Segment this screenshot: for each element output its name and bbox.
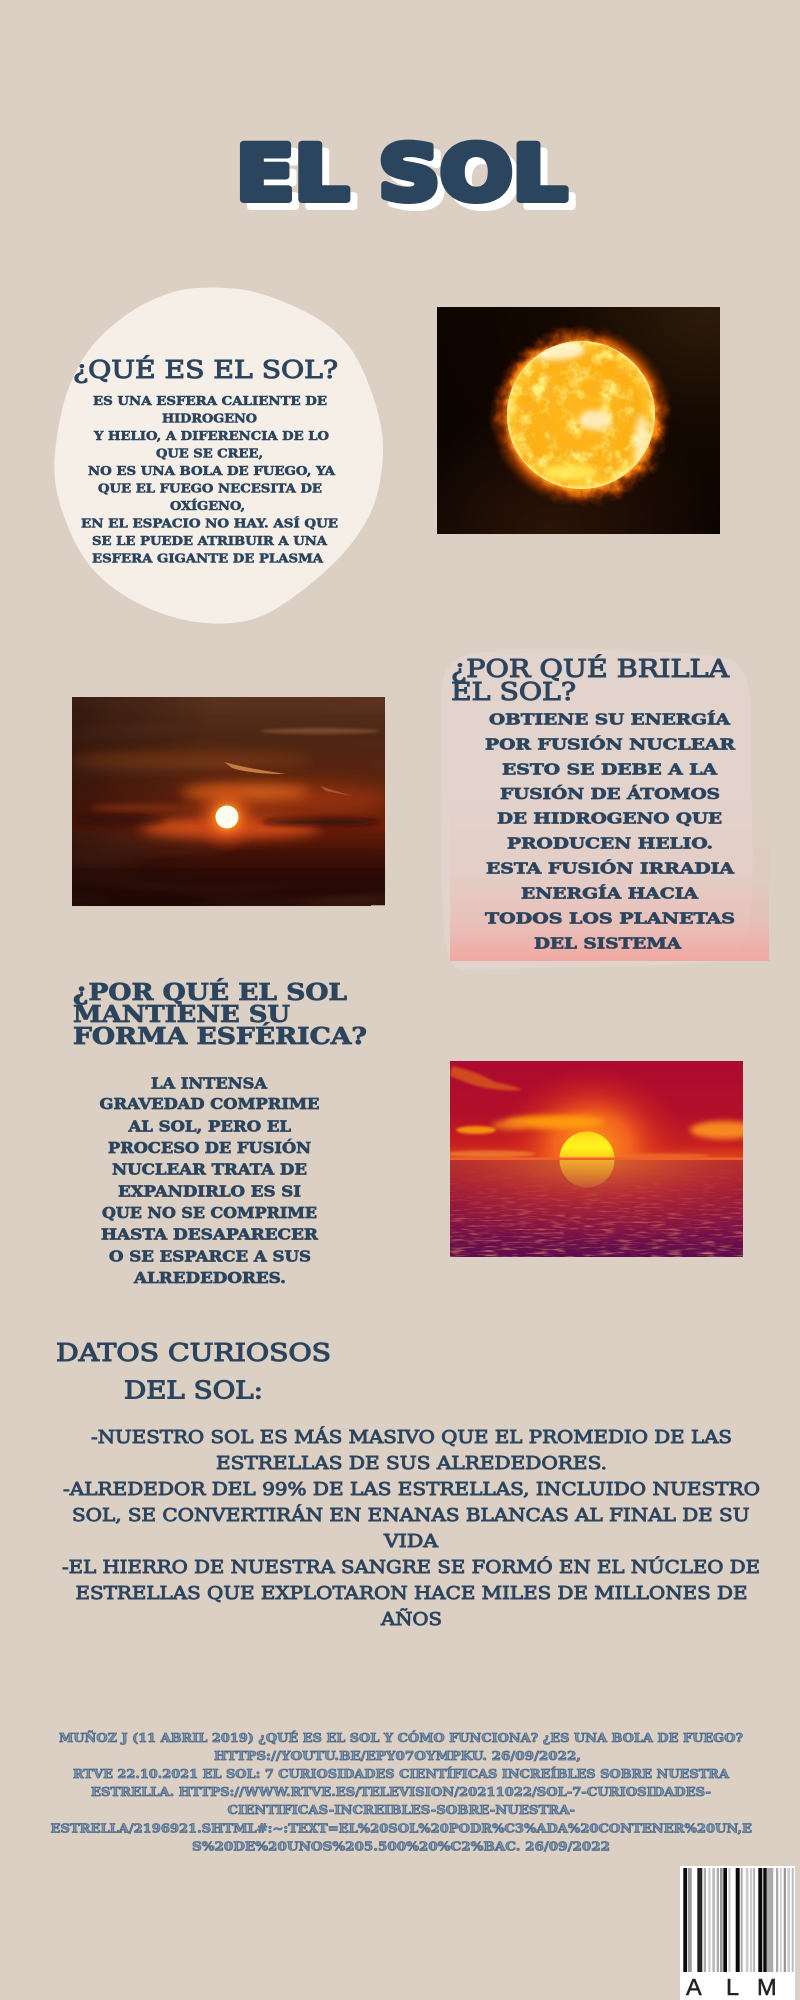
body text: EN EL ESPACIO NO HAY. ASÍ QUE bbox=[81, 516, 338, 531]
heading bbox=[73, 979, 367, 1050]
references text bbox=[50, 1729, 752, 1854]
body text: QUE EL FUEGO NECESITA DE bbox=[98, 482, 322, 496]
body text: LA INTENSA bbox=[151, 1074, 267, 1092]
body text: GRAVEDAD COMPRIME bbox=[100, 1095, 320, 1113]
title: El Sol: EL SOL bbox=[236, 128, 567, 218]
references text: ESTRELLA. HTTPS://WWW.RTVE.ES/TELEVISION/20211022/SOL-7-CURIOSIDADES- bbox=[91, 1785, 711, 1799]
panel: por qué brilla el sol bbox=[440, 648, 769, 970]
heading bbox=[451, 654, 730, 706]
blob background bbox=[54, 287, 383, 624]
body text: ESTA FUSIÓN IRRADIA bbox=[486, 860, 734, 878]
body text: QUE NO SE COMPRIME bbox=[102, 1204, 317, 1222]
heading: ¿POR QUÉ EL SOL bbox=[73, 979, 347, 1006]
facts text: SOL, SE CONVERTIRÁN EN ENANAS BLANCAS AL FINAL DE SU bbox=[72, 1503, 750, 1526]
references text: CIENTIFICAS-INCREIBLES-SOBRE-NUESTRA- bbox=[228, 1803, 575, 1817]
references text: RTVE 22.10.2021 EL SOL: 7 CURIOSIDADES CIENTÍFICAS INCREÍBLES SOBRE NUESTRA bbox=[73, 1766, 730, 1781]
panel: datos curiosos bbox=[56, 1339, 760, 1630]
body text: NUCLEAR TRATA DE bbox=[112, 1160, 307, 1178]
body text: OXÍGENO, bbox=[170, 498, 245, 513]
body text bbox=[100, 1074, 320, 1287]
barcode: A L M bbox=[686, 1974, 777, 2000]
body text bbox=[81, 394, 338, 566]
facts text: ESTRELLAS QUE EXPLOTARON HACE MILES DE MILLONES DE bbox=[76, 1583, 748, 1604]
body text: EXPANDIRLO ES SI bbox=[118, 1182, 301, 1200]
body text: NO ES UNA BOLA DE FUEGO, YA bbox=[88, 464, 336, 478]
panel: por qué el sol mantiene su forma esférica bbox=[73, 979, 367, 1287]
body text: AL SOL, PERO EL bbox=[127, 1117, 291, 1135]
image: sunset over the sea bbox=[450, 1061, 743, 1257]
body text: SE LE PUEDE ATRIBUIR A UNA bbox=[92, 534, 328, 548]
heading bbox=[56, 1339, 331, 1404]
heading: DATOS CURIOSOS bbox=[56, 1339, 331, 1367]
facts text bbox=[62, 1425, 760, 1630]
references text: MUÑOZ J (11 ABRIL 2019) ¿QUÉ ES EL SOL Y CÓMO FUNCIONA? ¿ES UNA BOLA DE FUEGO? bbox=[59, 1729, 743, 1745]
blob background bbox=[440, 648, 753, 970]
body text: QUE SE CREE, bbox=[156, 447, 263, 461]
body text: TODOS LOS PLANETAS bbox=[485, 910, 735, 928]
facts text: -NUESTRO SOL ES MÁS MASIVO QUE EL PROMEDIO DE LAS bbox=[91, 1425, 732, 1448]
body text: DE HIDROGENO QUE bbox=[497, 810, 722, 828]
image: sun in space bbox=[437, 307, 720, 534]
references text: HTTPS://YOUTU.BE/EPY07OYMPKU. 26/09/2022, bbox=[214, 1749, 581, 1763]
body text: ESTO SE DEBE A LA bbox=[502, 760, 717, 778]
body text: ES UNA ESFERA CALIENTE DE bbox=[93, 394, 327, 408]
body text bbox=[485, 710, 736, 952]
body text: ALREDEDORES. bbox=[133, 1269, 286, 1287]
body text: POR FUSIÓN NUCLEAR bbox=[485, 736, 736, 754]
body text: HIDROGENO bbox=[162, 412, 257, 426]
heading: EL SOL? bbox=[451, 678, 576, 706]
body text: O SE ESPARCE A SUS bbox=[109, 1247, 311, 1265]
body text: FUSIÓN DE ÁTOMOS bbox=[500, 785, 720, 803]
heading: MANTIENE SU bbox=[73, 1001, 290, 1028]
facts text: ESTRELLAS DE SUS ALREDEDORES. bbox=[216, 1453, 607, 1474]
facts text: AÑOS bbox=[380, 1607, 442, 1630]
pink gradient band bbox=[450, 793, 769, 961]
body text: PRODUCEN HELIO. bbox=[507, 834, 713, 852]
image: sunset with dark clouds bbox=[72, 697, 385, 906]
panel: qué es el sol bbox=[54, 287, 383, 624]
references text: ESTRELLA/2196921.SHTML#:~:TEXT=EL%20SOL%20PODR%C3%ADA%20CONTENER%20UN,E bbox=[50, 1822, 752, 1836]
body text: OBTIENE SU ENERGÍA bbox=[489, 710, 730, 728]
heading: ¿QUÉ ES EL SOL? bbox=[73, 355, 338, 384]
facts text: VIDA bbox=[383, 1531, 439, 1552]
body text: ENERGÍA HACIA bbox=[521, 884, 698, 902]
heading: ¿POR QUÉ BRILLA bbox=[451, 654, 730, 683]
body text: PROCESO DE FUSIÓN bbox=[108, 1139, 311, 1157]
facts text: -ALREDEDOR DEL 99% DE LAS ESTRELLAS, INCLUIDO NUESTRO bbox=[63, 1479, 760, 1500]
body text: ESFERA GIGANTE DE PLASMA bbox=[92, 552, 324, 566]
body text: Y HELIO, A DIFERENCIA DE LO bbox=[93, 429, 329, 443]
heading: DEL SOL: bbox=[124, 1376, 263, 1404]
title: El Sol: EL SOL bbox=[243, 136, 574, 224]
facts text: -EL HIERRO DE NUESTRA SANGRE SE FORMÓ EN EL NÚCLEO DE bbox=[62, 1555, 760, 1578]
heading: FORMA ESFÉRICA? bbox=[73, 1023, 367, 1050]
body text: DEL SISTEMA bbox=[534, 934, 681, 952]
references text: S%20DE%20UNOS%205.500%20%C2%BAC. 26/09/2022 bbox=[192, 1840, 610, 1854]
barcode bbox=[680, 1866, 795, 2000]
body text: HASTA DESAPARECER bbox=[101, 1225, 319, 1243]
